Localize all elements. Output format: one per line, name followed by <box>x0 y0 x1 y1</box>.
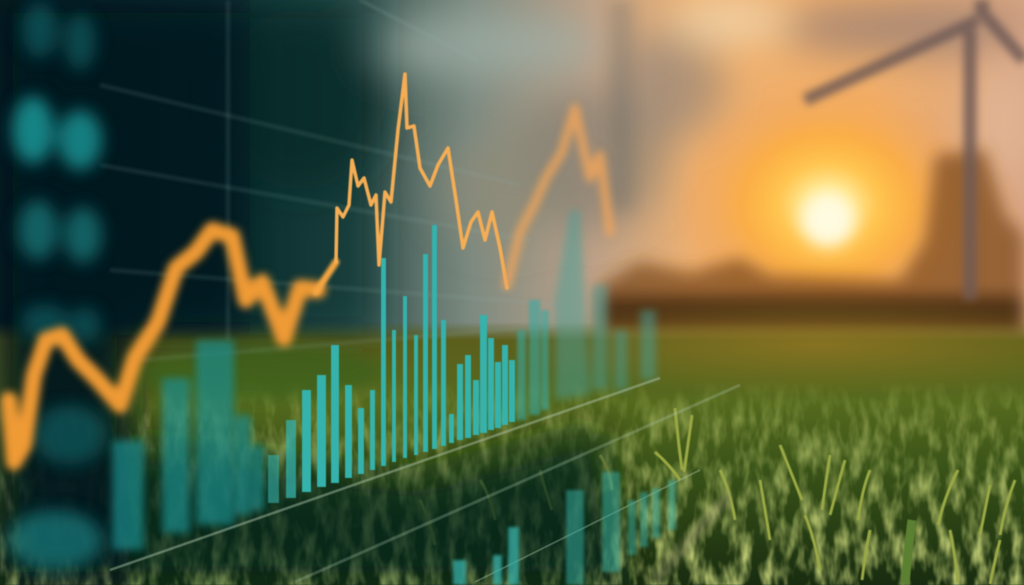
sharp line segment <box>336 74 507 288</box>
clouds <box>215 0 1024 240</box>
bar chart: main teal bars <box>112 210 656 550</box>
wind turbine <box>805 0 1024 300</box>
blurred near bars <box>112 340 264 550</box>
chart baseline <box>110 378 660 570</box>
lower bar chart <box>295 385 740 585</box>
tree line <box>600 150 1024 340</box>
blurred light streak in field <box>655 495 730 580</box>
dark glass overlay on left side <box>0 0 620 585</box>
distant pylon <box>610 0 632 210</box>
foreground grass blades <box>420 408 1015 584</box>
sun glow <box>678 80 978 330</box>
blurred side data readouts <box>7 2 106 570</box>
sharp middle bars <box>268 225 515 503</box>
orange line chart <box>9 74 610 462</box>
blurred far bars <box>517 300 549 420</box>
mid line segment <box>316 262 336 292</box>
sky background <box>0 0 1024 345</box>
chart grid lines <box>100 0 560 360</box>
near blurred line segment <box>9 230 318 462</box>
far blurred line segment <box>507 108 610 285</box>
grass field <box>0 295 1024 585</box>
green field patch behind chart <box>135 344 385 400</box>
